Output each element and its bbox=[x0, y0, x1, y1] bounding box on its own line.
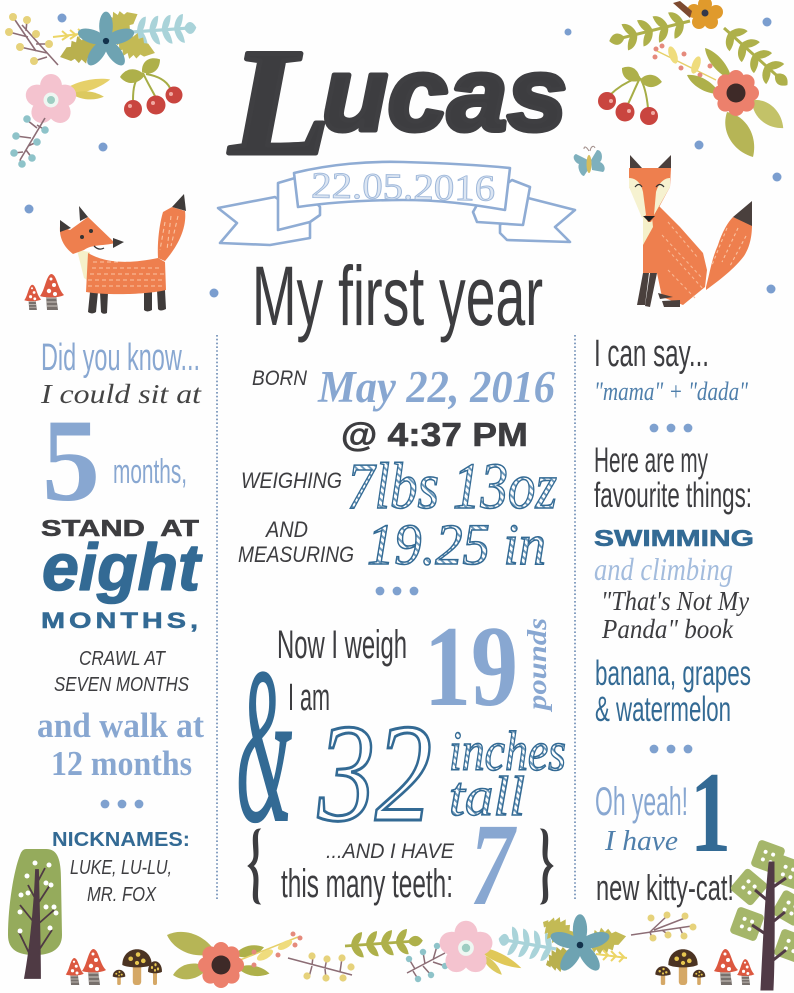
teal berry branch bbox=[10, 115, 49, 168]
length: AND bbox=[264, 517, 308, 542]
did you know bbox=[40, 337, 203, 409]
kitty cat: Oh yeah! bbox=[595, 780, 688, 824]
19 pounds: 19 bbox=[424, 603, 518, 731]
right fold bbox=[473, 180, 530, 225]
teal berry branch bbox=[406, 943, 448, 982]
brown bud bbox=[673, 1, 692, 18]
head bbox=[629, 168, 671, 222]
fox: sitting, right bbox=[629, 155, 752, 307]
blue confetti dots bbox=[24, 14, 782, 298]
stand at eight months: MONTHS, bbox=[41, 608, 202, 633]
I can say: I can say... bbox=[594, 333, 709, 375]
dots separator bbox=[101, 800, 143, 808]
cherries bbox=[598, 63, 662, 125]
big 5 months: months, bbox=[113, 453, 187, 491]
left brace bbox=[248, 829, 260, 904]
dotted column dividers bbox=[217, 335, 575, 900]
born date: May 22, 2016 bbox=[317, 362, 555, 412]
pink flower bbox=[23, 74, 79, 128]
walk at 12 months bbox=[37, 706, 204, 783]
length: 19.25 in bbox=[367, 512, 546, 577]
illustration: bottom-left woodland bbox=[8, 849, 424, 988]
olive leaves bbox=[98, 2, 144, 44]
kitty cat bbox=[595, 749, 734, 908]
square-leaf tree bbox=[729, 839, 794, 989]
crawl at seven months: SEVEN MONTHS bbox=[54, 674, 190, 696]
olive fern left bbox=[606, 8, 693, 54]
right ribbon tail bbox=[500, 198, 575, 242]
born date: BORN bbox=[252, 367, 308, 390]
body bbox=[643, 205, 707, 305]
leaves bbox=[701, 45, 736, 84]
mushrooms left of fox bbox=[24, 274, 64, 310]
kitty cat: I have bbox=[604, 826, 678, 857]
yellow berry branch bbox=[288, 952, 355, 982]
chest bbox=[77, 250, 90, 282]
coral flower bbox=[713, 70, 759, 116]
book: "That's Not My bbox=[601, 586, 749, 616]
I am: I am bbox=[288, 677, 330, 719]
crawl at seven months bbox=[54, 648, 190, 696]
blue flower bbox=[76, 12, 136, 69]
inches tall bbox=[449, 721, 566, 828]
kitty cat: 1 bbox=[690, 749, 731, 877]
nicknames bbox=[52, 829, 190, 906]
head bbox=[60, 217, 115, 254]
book: Panda" book bbox=[601, 614, 734, 644]
central band bbox=[294, 162, 510, 210]
book bbox=[601, 586, 749, 644]
weight bbox=[241, 450, 557, 523]
walk at 12 months: 12 months bbox=[51, 744, 192, 783]
mushrooms bbox=[655, 949, 754, 985]
favourite things bbox=[594, 441, 752, 515]
dots separator bbox=[650, 424, 692, 432]
dots separator bbox=[376, 587, 418, 595]
center column: current stats bbox=[236, 603, 566, 930]
favourite things: Here are my bbox=[594, 441, 708, 480]
heading: my first year: My first year bbox=[252, 249, 543, 343]
walk at 12 months: and walk at bbox=[37, 706, 204, 745]
title: ucas bbox=[322, 37, 567, 153]
round green tree bbox=[8, 849, 62, 978]
nicknames: NICKNAMES: bbox=[52, 829, 190, 851]
left ribbon tail bbox=[218, 197, 310, 245]
teeth: this many teeth: bbox=[281, 862, 453, 906]
left fold bbox=[278, 178, 320, 230]
teeth: ...AND I HAVE bbox=[326, 840, 455, 863]
title bbox=[228, 18, 567, 186]
pink flower bbox=[436, 921, 496, 977]
swimming and climbing: SWIMMING bbox=[594, 525, 754, 551]
yellow berry branch bbox=[631, 912, 696, 942]
center column: current stats: & bbox=[236, 623, 292, 869]
teal fern bbox=[131, 13, 197, 46]
length bbox=[238, 512, 546, 577]
did you know: Did you know... bbox=[41, 337, 200, 379]
nicknames: LUKE, LU-LU, bbox=[70, 857, 172, 879]
yellow leaves bbox=[59, 74, 112, 98]
olive fern bbox=[344, 928, 424, 959]
yellow chevrons bbox=[53, 29, 88, 40]
I can say: "mama" + "dada" bbox=[594, 377, 748, 406]
right brace bbox=[541, 829, 553, 904]
inches tall: tall bbox=[449, 766, 525, 828]
stand at eight months bbox=[41, 515, 203, 633]
stand at eight months: STAND AT bbox=[41, 515, 200, 541]
cherries bbox=[120, 54, 182, 118]
did you know: I could sit at bbox=[40, 379, 203, 409]
time: @ 4:37 PM bbox=[341, 416, 528, 453]
leaf bouquet bbox=[164, 926, 302, 988]
left column text bbox=[37, 337, 204, 906]
food bbox=[595, 654, 751, 729]
weight: 7lbs 13oz bbox=[347, 450, 557, 523]
19 pounds: pounds bbox=[522, 618, 552, 712]
illustration: bottom-right woodland bbox=[406, 839, 794, 989]
center column: birth details bbox=[238, 362, 557, 595]
length: MEASURING bbox=[238, 542, 354, 567]
fox: walking, left bbox=[60, 194, 186, 314]
yellow chevrons bbox=[596, 950, 627, 962]
body bbox=[86, 253, 166, 294]
blue flower bbox=[548, 914, 612, 974]
title: L bbox=[228, 18, 330, 186]
tail bbox=[158, 207, 185, 261]
tail bbox=[706, 217, 752, 290]
mushrooms bbox=[66, 949, 162, 985]
teeth bbox=[281, 799, 517, 930]
teal fern bbox=[496, 925, 559, 963]
legs bbox=[88, 290, 166, 314]
right column text bbox=[594, 333, 754, 908]
nicknames: MR. FOX bbox=[87, 884, 157, 906]
olive leaves bbox=[536, 910, 584, 954]
yellow berry branch bbox=[5, 13, 58, 65]
weight: WEIGHING bbox=[241, 468, 342, 493]
crawl at seven months: CRAWL AT bbox=[79, 648, 167, 670]
orange flower bbox=[687, 0, 723, 29]
teeth: 7 bbox=[470, 799, 517, 930]
chest bbox=[643, 217, 653, 245]
inches tall: inches bbox=[449, 721, 566, 783]
now I weigh: Now I weigh bbox=[277, 623, 407, 667]
yellow leaves bbox=[474, 943, 523, 972]
illustration: top-left florals bbox=[5, 2, 197, 168]
swimming and climbing: and climbing bbox=[594, 551, 733, 587]
I can say bbox=[594, 333, 748, 406]
date banner bbox=[218, 162, 575, 245]
illustration: top-right florals bbox=[574, 0, 794, 176]
date text: 22.05.2016 bbox=[311, 165, 496, 210]
yellow sprig bbox=[652, 44, 716, 80]
big 5 months: 5 bbox=[42, 395, 100, 526]
stand at eight months: eight bbox=[42, 530, 203, 604]
butterfly bbox=[574, 146, 605, 176]
dots separator bbox=[650, 745, 692, 753]
olive fern right bbox=[715, 18, 794, 95]
ears bbox=[630, 155, 671, 168]
32: 32 bbox=[317, 696, 432, 851]
big 5 months bbox=[42, 395, 187, 526]
swimming and climbing bbox=[594, 525, 754, 587]
legs bbox=[637, 273, 680, 307]
